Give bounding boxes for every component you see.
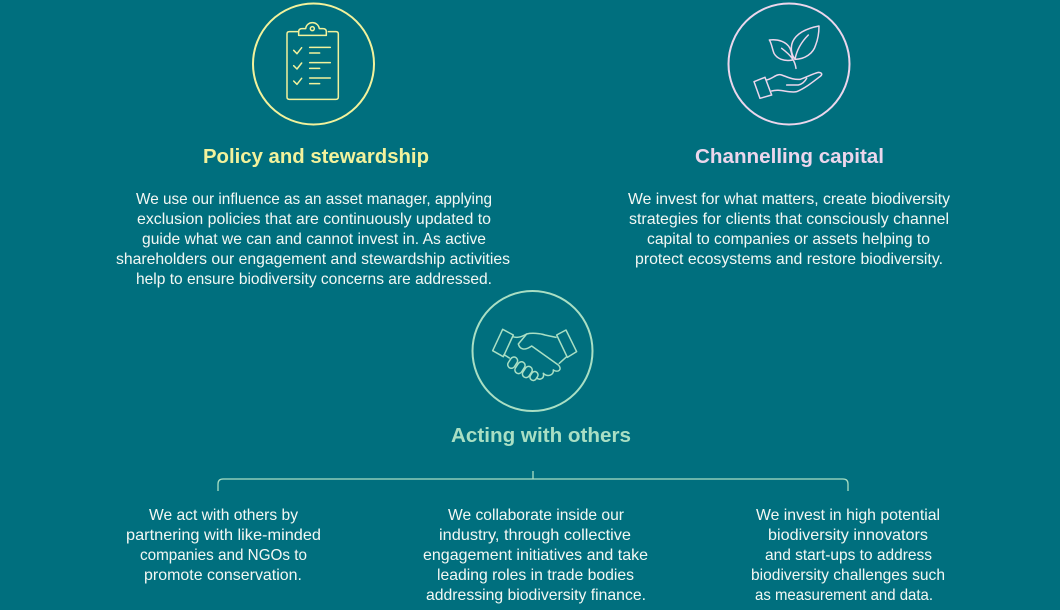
panel: acting with others — [126, 291, 945, 604]
bracket connector — [218, 471, 848, 491]
text block: collaboration column — [423, 507, 648, 604]
text block: collaboration column: addressing biodiversity finance. — [426, 587, 646, 604]
text block: channelling description: We invest for what matters, create biodiversity — [628, 191, 950, 208]
text block: innovators column: biodiversity challenges such — [751, 567, 945, 584]
text block: policy description: exclusion policies that are continuously updated to — [137, 211, 491, 228]
text block: innovators column: and start-ups to address — [765, 547, 932, 564]
text block: policy description: shareholders our engagement and stewardship activities — [116, 251, 510, 268]
text block: policy description: guide what we can and cannot invest in. As active — [142, 231, 486, 248]
text block: channelling description: capital to companies or assets helping to — [647, 231, 930, 248]
text block: collaboration column: industry, through collective — [439, 527, 631, 544]
text block: innovators column: biodiversity innovators — [768, 527, 928, 544]
panel: channelling capital — [628, 4, 950, 268]
text block: partnering column: promote conservation. — [144, 567, 302, 584]
text block: partnering column: We act with others by — [149, 507, 298, 524]
text block: partnering column — [126, 507, 321, 584]
heading: policy and stewardship: Policy and stewardship — [203, 146, 429, 168]
text block: channelling description: protect ecosystems and restore biodiversity. — [635, 251, 943, 268]
text block: innovators column — [751, 507, 945, 604]
text block: channelling description — [628, 191, 950, 268]
text block: innovators column: as measurement and data. — [755, 587, 933, 604]
text block: collaboration column: engagement initiatives and take — [423, 547, 648, 564]
text block: partnering column: companies and NGOs to — [140, 547, 307, 564]
icon: clipboard in circle — [253, 4, 374, 124]
heading: acting with others: Acting with others — [451, 425, 631, 447]
text block: collaboration column: leading roles in trade bodies — [437, 567, 634, 584]
icon: handshake in circle — [472, 291, 592, 411]
text block: policy description: help to ensure biodiversity concerns are addressed. — [136, 271, 492, 288]
icon: plant over hand in circle — [728, 4, 850, 124]
text block: channelling description: strategies for clients that consciously channel — [629, 211, 949, 228]
panel: policy and stewardship — [116, 4, 510, 288]
text block: innovators column: We invest in high potential — [756, 507, 940, 524]
text block: partnering column: partnering with like-minded — [126, 527, 321, 544]
text block: policy description — [116, 191, 510, 288]
text block: policy description: We use our influence as an asset manager, applying — [136, 191, 492, 208]
heading: channelling capital: Channelling capital — [695, 146, 884, 168]
text block: collaboration column: We collaborate inside our — [448, 507, 624, 524]
